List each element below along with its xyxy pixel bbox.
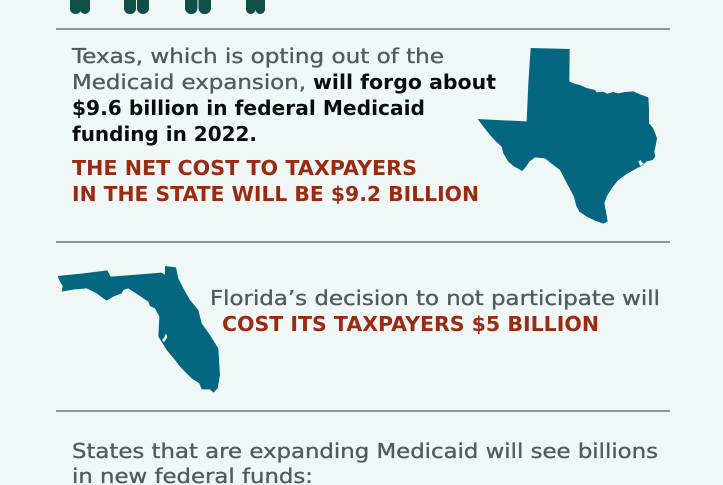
text block: Texas: Medicaid expansion, bbox=[72, 70, 306, 94]
icon: Texas map bbox=[478, 48, 657, 224]
text block: Texas: Texas, which is opting out of the bbox=[71, 44, 444, 68]
callout: Texas net cost: THE NET COST TO TAXPAYERS bbox=[72, 156, 417, 180]
icon: Florida map bbox=[58, 266, 220, 393]
icon row: figure legs bbox=[70, 0, 265, 14]
text block: Texas: $9.6 billion in federal Medicaid bbox=[72, 96, 425, 120]
text block: Florida: COST ITS TAXPAYERS $5 BILLION bbox=[222, 312, 599, 336]
text block: expanding states: States that are expanding Medicaid will see billions bbox=[72, 439, 658, 463]
text block: Texas bbox=[71, 44, 496, 146]
callout: Texas net cost bbox=[72, 156, 479, 206]
text block: Texas: will forgo about bbox=[313, 70, 496, 94]
callout: Texas net cost: IN THE STATE WILL BE $9.2 BILLION bbox=[72, 182, 479, 206]
text block: Florida bbox=[210, 286, 660, 336]
text block: expanding states bbox=[72, 439, 658, 485]
text block: Texas: funding in 2022. bbox=[72, 122, 257, 146]
text block: Florida: Florida’s decision to not participate will bbox=[210, 286, 660, 310]
